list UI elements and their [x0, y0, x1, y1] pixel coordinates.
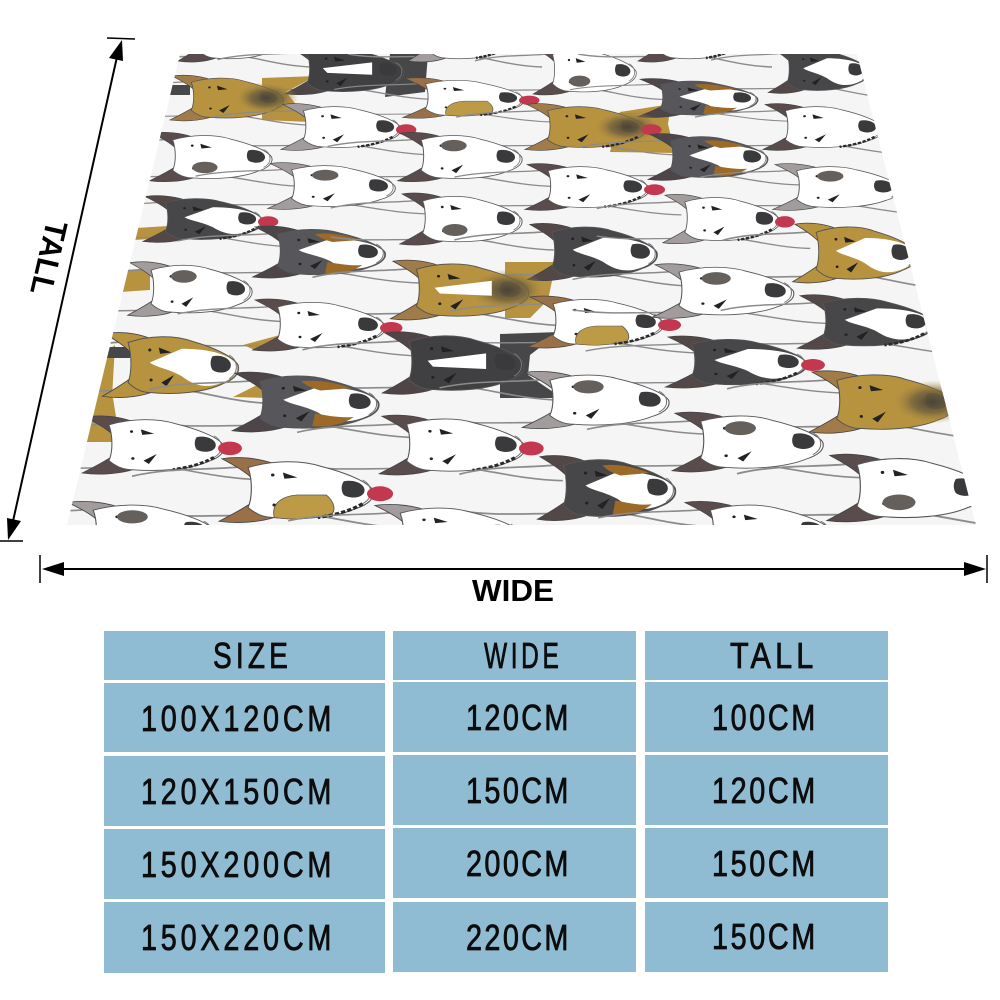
table header row: SIZE: [213, 636, 288, 676]
dog: black brindle top: [217, 54, 428, 100]
table row: 100X120CM: 120CM: [466, 697, 568, 738]
dog: tricolour: [570, 79, 789, 121]
dog: white and tan bottom: [132, 458, 413, 529]
dog: tan row two left: [165, 74, 306, 126]
dog: tan centre with tongue: [456, 104, 677, 155]
table row: 150X200CM: 150CM: [712, 843, 815, 884]
table row: 100X120CM: [141, 697, 815, 739]
dog: large brindle: [454, 223, 691, 286]
dog: white centre with tongue: [297, 415, 563, 481]
table row: 150X220CM: [141, 916, 815, 958]
dog: brindle right: [720, 294, 932, 352]
dog: top-left dark ear: [178, 54, 310, 68]
tan and dark body patches: [85, 54, 675, 442]
dog: white brown ear: [327, 132, 554, 186]
dog: cropped bottom right: [598, 501, 870, 564]
dog: brindle top right: [711, 54, 868, 96]
dog: white eye patch centre: [439, 371, 707, 434]
dog: white with dark patch right: [587, 412, 862, 478]
table row: 150X200CM: 150X200CM: [141, 844, 331, 885]
dog: tan left edge: [99, 332, 262, 404]
table row: 150X200CM: [141, 843, 815, 885]
label: WIDE: WIDE: [472, 573, 554, 608]
dog: white dark ear: [331, 193, 554, 250]
dog: large tan centre: [312, 260, 565, 326]
table row: 120X150CM: 120CM: [712, 770, 815, 811]
table header row: [213, 635, 813, 677]
dog: large black brindle: [303, 332, 561, 400]
table row: 150X220CM: 150X220CM: [141, 917, 331, 958]
dog: white grey ears right: [700, 163, 897, 213]
dog: tricolour row four: [178, 226, 420, 283]
table header row: WIDE: [484, 635, 559, 676]
dog: large tan right: [726, 370, 954, 436]
dog: dark ear cropped: [578, 54, 772, 68]
dog: grey tricolour: [149, 372, 417, 438]
dog: white with tongue centre: [454, 164, 681, 215]
dog: white left row five: [118, 261, 280, 322]
table row: 150X220CM: 150CM: [712, 916, 815, 957]
dog: brindle with tongue: [136, 195, 280, 247]
dog: white grey ears: [196, 163, 428, 214]
dog: white left patch: [150, 132, 294, 187]
dog: white with dark ear: [474, 54, 662, 100]
table row: 120X150CM: 150CM: [466, 770, 568, 811]
dog: white grey ears with tongue: [597, 194, 810, 248]
dog: white with dark eye patch: [573, 264, 831, 324]
dog: white and tan centre: [451, 296, 699, 353]
table row: 120X150CM: 120X150CM: [141, 771, 331, 812]
dog: white and tan with tongue: [334, 78, 555, 122]
arrow: tall dimension: [0, 38, 135, 541]
dog: white dark ears right: [694, 103, 882, 153]
dog: white left with tongue: [80, 416, 250, 480]
panel: blanket with dog pattern: [68, 54, 976, 525]
dog: brindle white muzzle tongue: [586, 336, 844, 393]
dog: tricolour orange: [580, 134, 799, 185]
dog: white top cropped: [348, 54, 542, 68]
table row: 120X150CM: [141, 770, 815, 812]
table row: 100X120CM: 100CM: [712, 697, 815, 738]
table row: 100X120CM: 100X120CM: [141, 698, 331, 739]
arrow: wide dimension: [40, 555, 987, 583]
table row: 150X220CM: 220CM: [466, 917, 568, 958]
dog: white bottom right: [737, 454, 1000, 528]
dog: brindle tricolour bottom: [459, 456, 712, 527]
table header row: TALL: [730, 637, 813, 677]
dog: cropped bottom centre: [288, 504, 560, 567]
dog: white with tongue: [178, 299, 420, 356]
dog: white grey ears: [213, 104, 432, 155]
size table: [104, 631, 888, 973]
table cells: [104, 631, 888, 973]
table row: 150X200CM: 200CM: [466, 843, 568, 884]
dog: tan right edge: [722, 222, 916, 286]
dog: cropped bottom left: [0, 501, 253, 564]
label: TALL: TALL: [23, 217, 74, 298]
